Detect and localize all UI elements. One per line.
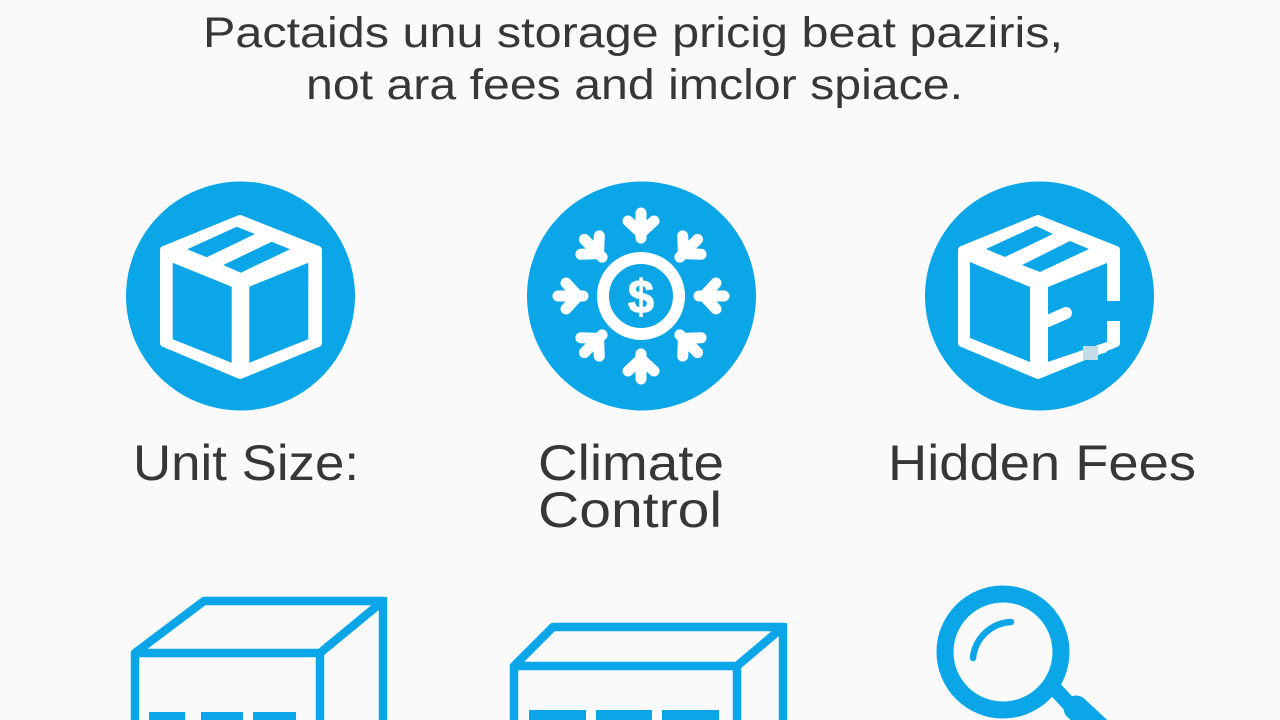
- label: climate control: Control: [538, 482, 722, 538]
- label: climate control: [538, 435, 724, 538]
- icon: climate control badge: $: [628, 270, 654, 323]
- title: Pactaids unu storage pricig beat paziris,: [203, 9, 1063, 57]
- title: [203, 9, 1063, 109]
- label: hidden fees: Hidden Fees: [888, 435, 1196, 491]
- icon: unit size box badge: [126, 182, 355, 410]
- icon: storage unit outline left: [135, 597, 387, 720]
- icon: magnifying glass: [945, 594, 1105, 720]
- label: unit size: Unit Size:: [133, 435, 359, 491]
- icon: storage unit outline middle: [514, 623, 787, 720]
- label: climate control: Climate: [538, 435, 724, 491]
- title: not ara fees and imclor spiace.: [306, 61, 963, 109]
- icon: climate control badge: [527, 182, 756, 410]
- icon: hidden fees box badge: [925, 182, 1154, 410]
